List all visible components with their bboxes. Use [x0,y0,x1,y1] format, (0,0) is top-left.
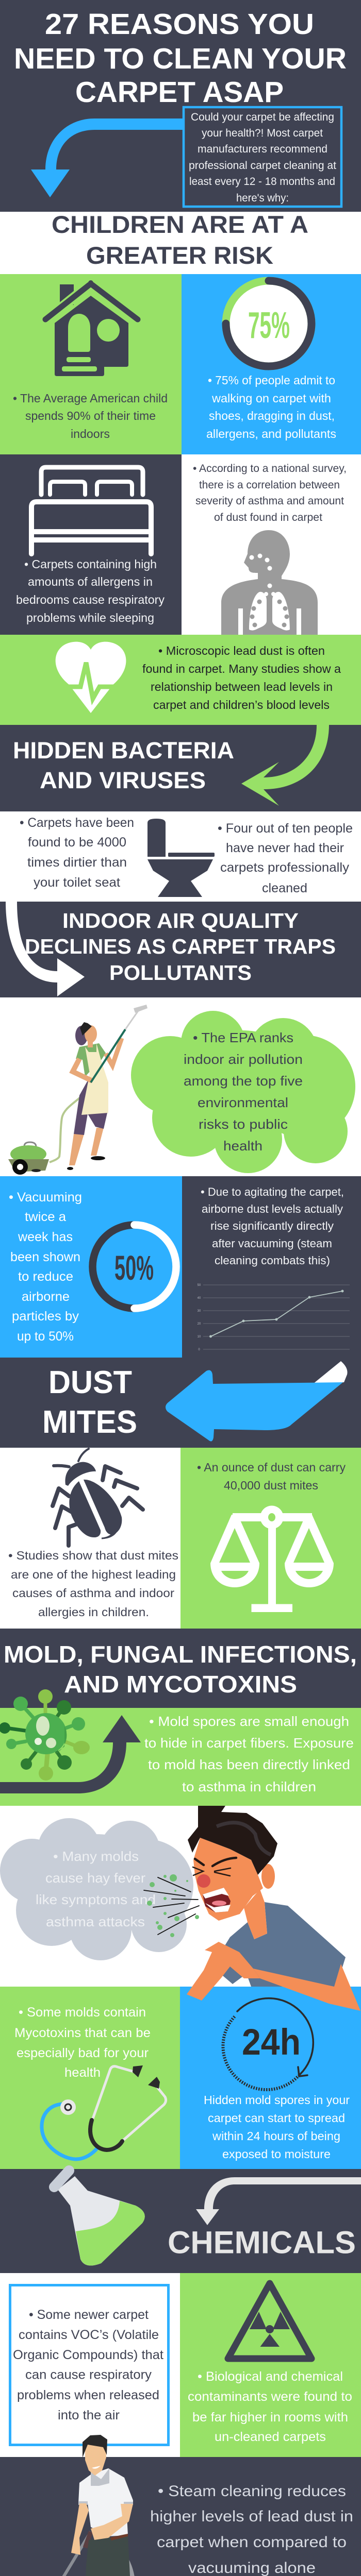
chart: airborne dust line: 50 [198,1284,201,1287]
text: mycotoxins: especially bad for your [17,2046,149,2060]
text: carpets dirtier: found to be 4000 [28,835,126,850]
panel: hidden bacteria header [0,725,361,811]
panel: lead dust [0,635,361,725]
text: bedrooms: • Carpets containing high [24,557,157,571]
illustration: woman dusting [8,1005,147,1175]
panel: steam cleaning [0,2457,361,2576]
panel: airborne dust and dust mites header [0,1176,361,1448]
panel: hay fever [0,1806,346,1987]
title: NEED TO CLEAN YOUR [14,42,347,75]
text: four out of ten: cleaned [262,881,307,895]
text: average child: indoors [71,427,110,440]
heading: indoor air [25,909,336,985]
text: agitating the carpet: rise significantly directly [210,1219,334,1232]
heading: indoor air: INDOOR AIR QUALITY [62,909,299,933]
text: ounce of dust: • An ounce of dust can carry [197,1461,346,1474]
panel: asthma correlation [193,463,347,636]
cloud: EPA ranks: environmental [198,1095,288,1110]
text: mold spores [144,1714,354,1794]
panel: mold spores [0,1689,361,1806]
text: ounce of dust: 40,000 dust mites [224,1479,318,1492]
cloud: EPA ranks: risks to public [199,1116,288,1132]
text: national survey [193,463,347,523]
text: ounce of dust [197,1461,346,1492]
text: mycotoxins [14,2005,151,2080]
text: national survey: severity of asthma and amount [195,495,344,507]
callout: intro box: Could your carpet be affecting [191,111,334,123]
text: studies dust mites: • Studies show that dust mites [8,1549,178,1562]
text: agitating the carpet: • Due to agitating the carpet, [201,1185,344,1198]
text: national survey: of dust found in carpet [214,512,322,523]
callout: intro box: professional carpet cleaning at [189,160,336,172]
text: four out of ten [218,821,353,895]
panel: mold header [0,1629,361,1708]
text: vacuuming: up to 50% [17,1329,74,1344]
text: bedrooms: amounts of allergens in [28,575,153,588]
illustration: sneezing man [144,1806,346,1987]
text: steam cleaning: • Steam cleaning reduces [158,2483,346,2500]
panel: indoor air quality header [0,902,361,997]
callout: intro box: your health?! Most carpet [202,127,323,139]
heading: children: CHILDREN ARE AT A [52,211,308,238]
text: 75 percent: allergens, and pollutants [206,427,336,440]
text: studies dust mites: are one of the highest leading [11,1568,176,1581]
text: VOCs: contains VOC’s (Volatile [19,2328,159,2342]
text: lead dust: found in carpet. Many studies show a [142,662,341,675]
text: hidden mold: exposed to moisture [222,2147,331,2161]
cloud: EPA ranks: health [223,1138,262,1154]
icon: scales [210,1505,334,1612]
heading: dust mites [42,1365,137,1440]
icon: heart with pulse [52,642,132,713]
text: four out of ten: have never had their [226,841,344,855]
panel: VOC box [10,2285,168,2445]
title: CARPET ASAP [75,76,284,109]
arrow: dark curved up [0,1715,141,1793]
panel: bedrooms [0,454,182,635]
text: lead dust: • Microscopic lead dust is often [158,644,325,657]
text: hidden mold: carpet can start to spread [208,2111,345,2125]
icon: lungs figure [221,530,318,636]
text: lead dust [142,644,341,711]
heading: dust mites: DUST [48,1365,132,1400]
heading: bacteria: HIDDEN BACTERIA [13,737,234,764]
heading: dust mites: MITES [42,1404,137,1440]
cloud: hay fever: asthma attacks [46,1914,145,1929]
text: average child: spends 90% of their time [25,409,156,422]
text: steam cleaning [150,2483,353,2576]
text: studies dust mites [8,1549,178,1619]
text: vacuuming: been shown [10,1250,80,1264]
chart: 50% ring [93,1225,176,1309]
chart: 75% ring [226,281,311,366]
cloud: EPA ranks: indoor air pollution [184,1052,303,1067]
chart: airborne dust line: 0 [198,1348,200,1351]
panel: ounce of dust [180,1448,361,1629]
heading: bacteria [13,737,234,793]
text: vacuuming [9,1190,82,1344]
panel: biological contaminants [180,2273,361,2457]
text: bedrooms: problems while sleeping [26,611,154,624]
chart: airborne dust line: 10 [198,1335,201,1338]
text: VOCs: Organic Compounds) that [13,2348,163,2362]
arrow: blue ribbon left [166,1361,348,1442]
chart: airborne dust line: 30 [198,1310,201,1313]
text: mold spores: • Mold spores are small enough [149,1714,349,1729]
panel: chemicals header [0,2169,361,2273]
callout: intro box: here's why: [236,192,289,204]
text: mycotoxins: • Some molds contain [19,2005,146,2020]
icon: bug [53,1449,143,1546]
chart: 50% ring: 50% [114,1249,154,1287]
text: lead dust: relationship between lead levels in [151,680,333,693]
panel: header [0,0,361,212]
text: carpets dirtier: times dirtier than [27,855,127,870]
text: carpets dirtier [20,816,134,890]
text: biological: be far higher in rooms with [192,2410,348,2425]
heading: mold [4,1641,357,1698]
icon: stethoscope [42,2065,166,2159]
cloud: EPA ranks: • The EPA ranks [193,1030,293,1045]
text: hidden mold [204,2093,350,2161]
text: agitating the carpet: after vacuuming (steam [212,1237,332,1250]
heading: indoor air: POLLUTANTS [109,961,252,985]
text: biological: un-cleaned carpets [215,2430,326,2444]
icon: radiation warning [228,2283,311,2359]
title [14,8,347,109]
text: agitating the carpet: airborne dust levels actually [202,1202,343,1215]
cloud: hay fever: cause hay fever [45,1870,145,1886]
icon: virus [0,1689,90,1781]
heading: chemicals: CHEMICALS [168,2225,356,2260]
icon: toilet [147,819,215,897]
heading: children: GREATER RISK [86,242,273,269]
callout: intro box: manufacturers recommend [198,143,327,155]
chart: airborne dust line: 20 [198,1323,201,1326]
arrow: light curved down [196,2177,361,2225]
text: four out of ten: carpets professionally [220,860,350,875]
text: vacuuming: particles by [12,1309,79,1324]
text: 75 percent: walking on carpet with [211,392,331,405]
icon: 24h clock [223,1998,313,2090]
illustration: man vacuuming [2,2435,190,2576]
heading: children [52,211,308,269]
chart: airborne dust line [198,1284,350,1351]
icon: 24h clock: 24h [242,2022,301,2063]
icon: house [45,280,138,376]
panel: dust mite causes [8,1449,178,1619]
title: 27 REASONS YOU [45,8,314,41]
text: mycotoxins: Mycotoxins that can be [14,2026,151,2040]
text: national survey: • According to a national survey, [193,463,347,474]
text: bedrooms [16,557,165,624]
arrow: blue curved down [31,118,184,197]
illustration: sneezing man arm [187,1942,360,2011]
text: 75 percent [206,374,336,440]
callout: intro box: least every 12 - 18 months and [189,176,335,188]
text: average child [13,392,168,440]
cloud: hay fever: like symptoms and [36,1892,156,1907]
text: mold spores: to mold has been directly linked [148,1757,350,1772]
arrow: white curved right [6,902,85,996]
heading: mold: AND MYCOTOXINS [64,1671,297,1698]
text: vacuuming: twice a [25,1210,66,1224]
text: VOCs: • Some newer carpet [29,2308,149,2322]
panel: EPA ranks [8,1005,355,1175]
panel: vacuuming twice a week [0,1176,182,1358]
text: VOCs: into the air [58,2408,120,2422]
text: carpets dirtier: • Carpets have been [20,816,134,830]
text: vacuuming: to reduce [18,1269,73,1284]
arrow: green curved left [241,725,329,806]
text: hidden mold: Hidden mold spores in your [204,2093,350,2107]
panel: average child indoors [0,274,182,454]
chart: 75% ring: 75% [248,305,290,346]
icon: flask [54,2171,145,2266]
text: vacuuming: airborne [22,1290,70,1304]
text: biological: • Biological and chemical [198,2369,343,2384]
panel: 24 hours [180,1987,361,2169]
text: mold spores: to asthma in children [182,1779,316,1794]
text: mold spores: to hide in carpet fibers. Exposure [144,1735,354,1751]
text: carpets dirtier: your toilet seat [34,875,120,890]
chart: airborne dust line: 40 [198,1297,201,1300]
text: national survey: there is a correlation between [199,479,340,491]
text: steam cleaning: carpet when compared to [157,2534,347,2551]
text: agitating the carpet: cleaning combats this) [215,1254,330,1267]
panel: mycotoxins [0,1987,180,2169]
text: 75 percent: • 75% of people admit to [208,374,335,387]
text: average child: • The Average American child [13,392,168,405]
text: VOCs: problems when released [17,2388,159,2402]
callout: intro box [184,107,341,207]
icon: bed [31,467,151,554]
text: hidden mold: within 24 hours of being [212,2129,340,2143]
text: studies dust mites: causes of asthma and indoor [12,1586,174,1600]
text: mycotoxins: health [64,2065,101,2080]
text: VOCs: can cause respiratory [25,2368,152,2382]
text: steam cleaning: higher levels of lead dust in [150,2508,353,2525]
cloud: EPA ranks: among the top five [184,1073,303,1089]
text: biological: contaminants were found to [188,2389,352,2404]
panel: toilet comparison [20,816,353,897]
text: 75 percent: shoes, dragging in dust, [209,409,335,422]
text: biological [188,2369,352,2444]
text: four out of ten: • Four out of ten people [218,821,353,836]
text: VOCs [13,2308,163,2422]
cloud: EPA ranks [131,1011,355,1173]
heading: mold: MOLD, FUNGAL INFECTIONS, [4,1641,357,1668]
text: bedrooms: bedrooms cause respiratory [16,593,165,606]
cloud: hay fever: • Many molds [53,1849,139,1864]
text: lead dust: carpet and children’s blood levels [153,698,330,711]
text: vacuuming: • Vacuuming [9,1190,82,1205]
cloud: hay fever [0,1818,193,1960]
text: agitating the carpet [201,1185,344,1267]
text: studies dust mites: allergies in children. [38,1605,149,1619]
heading: bacteria: AND VIRUSES [40,767,206,793]
heading: indoor air: DECLINES AS CARPET TRAPS [25,935,336,958]
panel: 75 percent shoes [182,274,361,454]
text: vacuuming: week has [18,1230,73,1244]
